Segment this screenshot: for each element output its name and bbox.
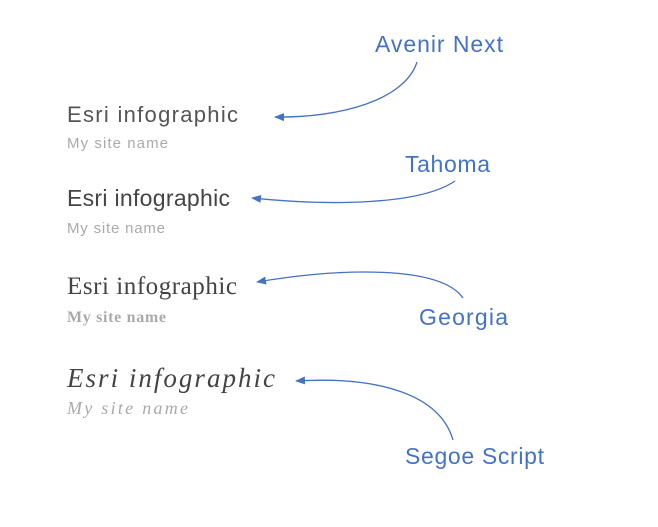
- sample: Georgia: Esri infographic: [67, 273, 237, 300]
- sample: Segoe Script: [66, 363, 275, 418]
- sample: Segoe Script: Esri infographic: [66, 363, 275, 393]
- sample: Tahoma: [67, 185, 230, 237]
- arrow: Tahoma: [252, 181, 455, 202]
- sample: Segoe Script: My site name: [66, 398, 188, 418]
- arrow: Avenir: [275, 62, 417, 117]
- sample: Avenir Next: My site name: [67, 135, 168, 152]
- label: Tahoma: Tahoma: [405, 151, 490, 177]
- sample: Georgia: [67, 273, 237, 326]
- sample: Avenir Next: Esri infographic: [67, 102, 238, 127]
- sample: Tahoma: My site name: [67, 220, 165, 237]
- label: Georgia: Georgia: [419, 304, 508, 330]
- sample: Avenir Next: [67, 102, 238, 152]
- arrow: Georgia: [257, 272, 463, 298]
- label: Segoe Script: Segoe Script: [405, 443, 545, 469]
- sample: Tahoma: Esri infographic: [67, 185, 230, 211]
- arrow: Segoe: [296, 380, 453, 440]
- label: Avenir Next: Avenir Next: [375, 31, 504, 57]
- sample: Georgia: My site name: [67, 309, 166, 326]
